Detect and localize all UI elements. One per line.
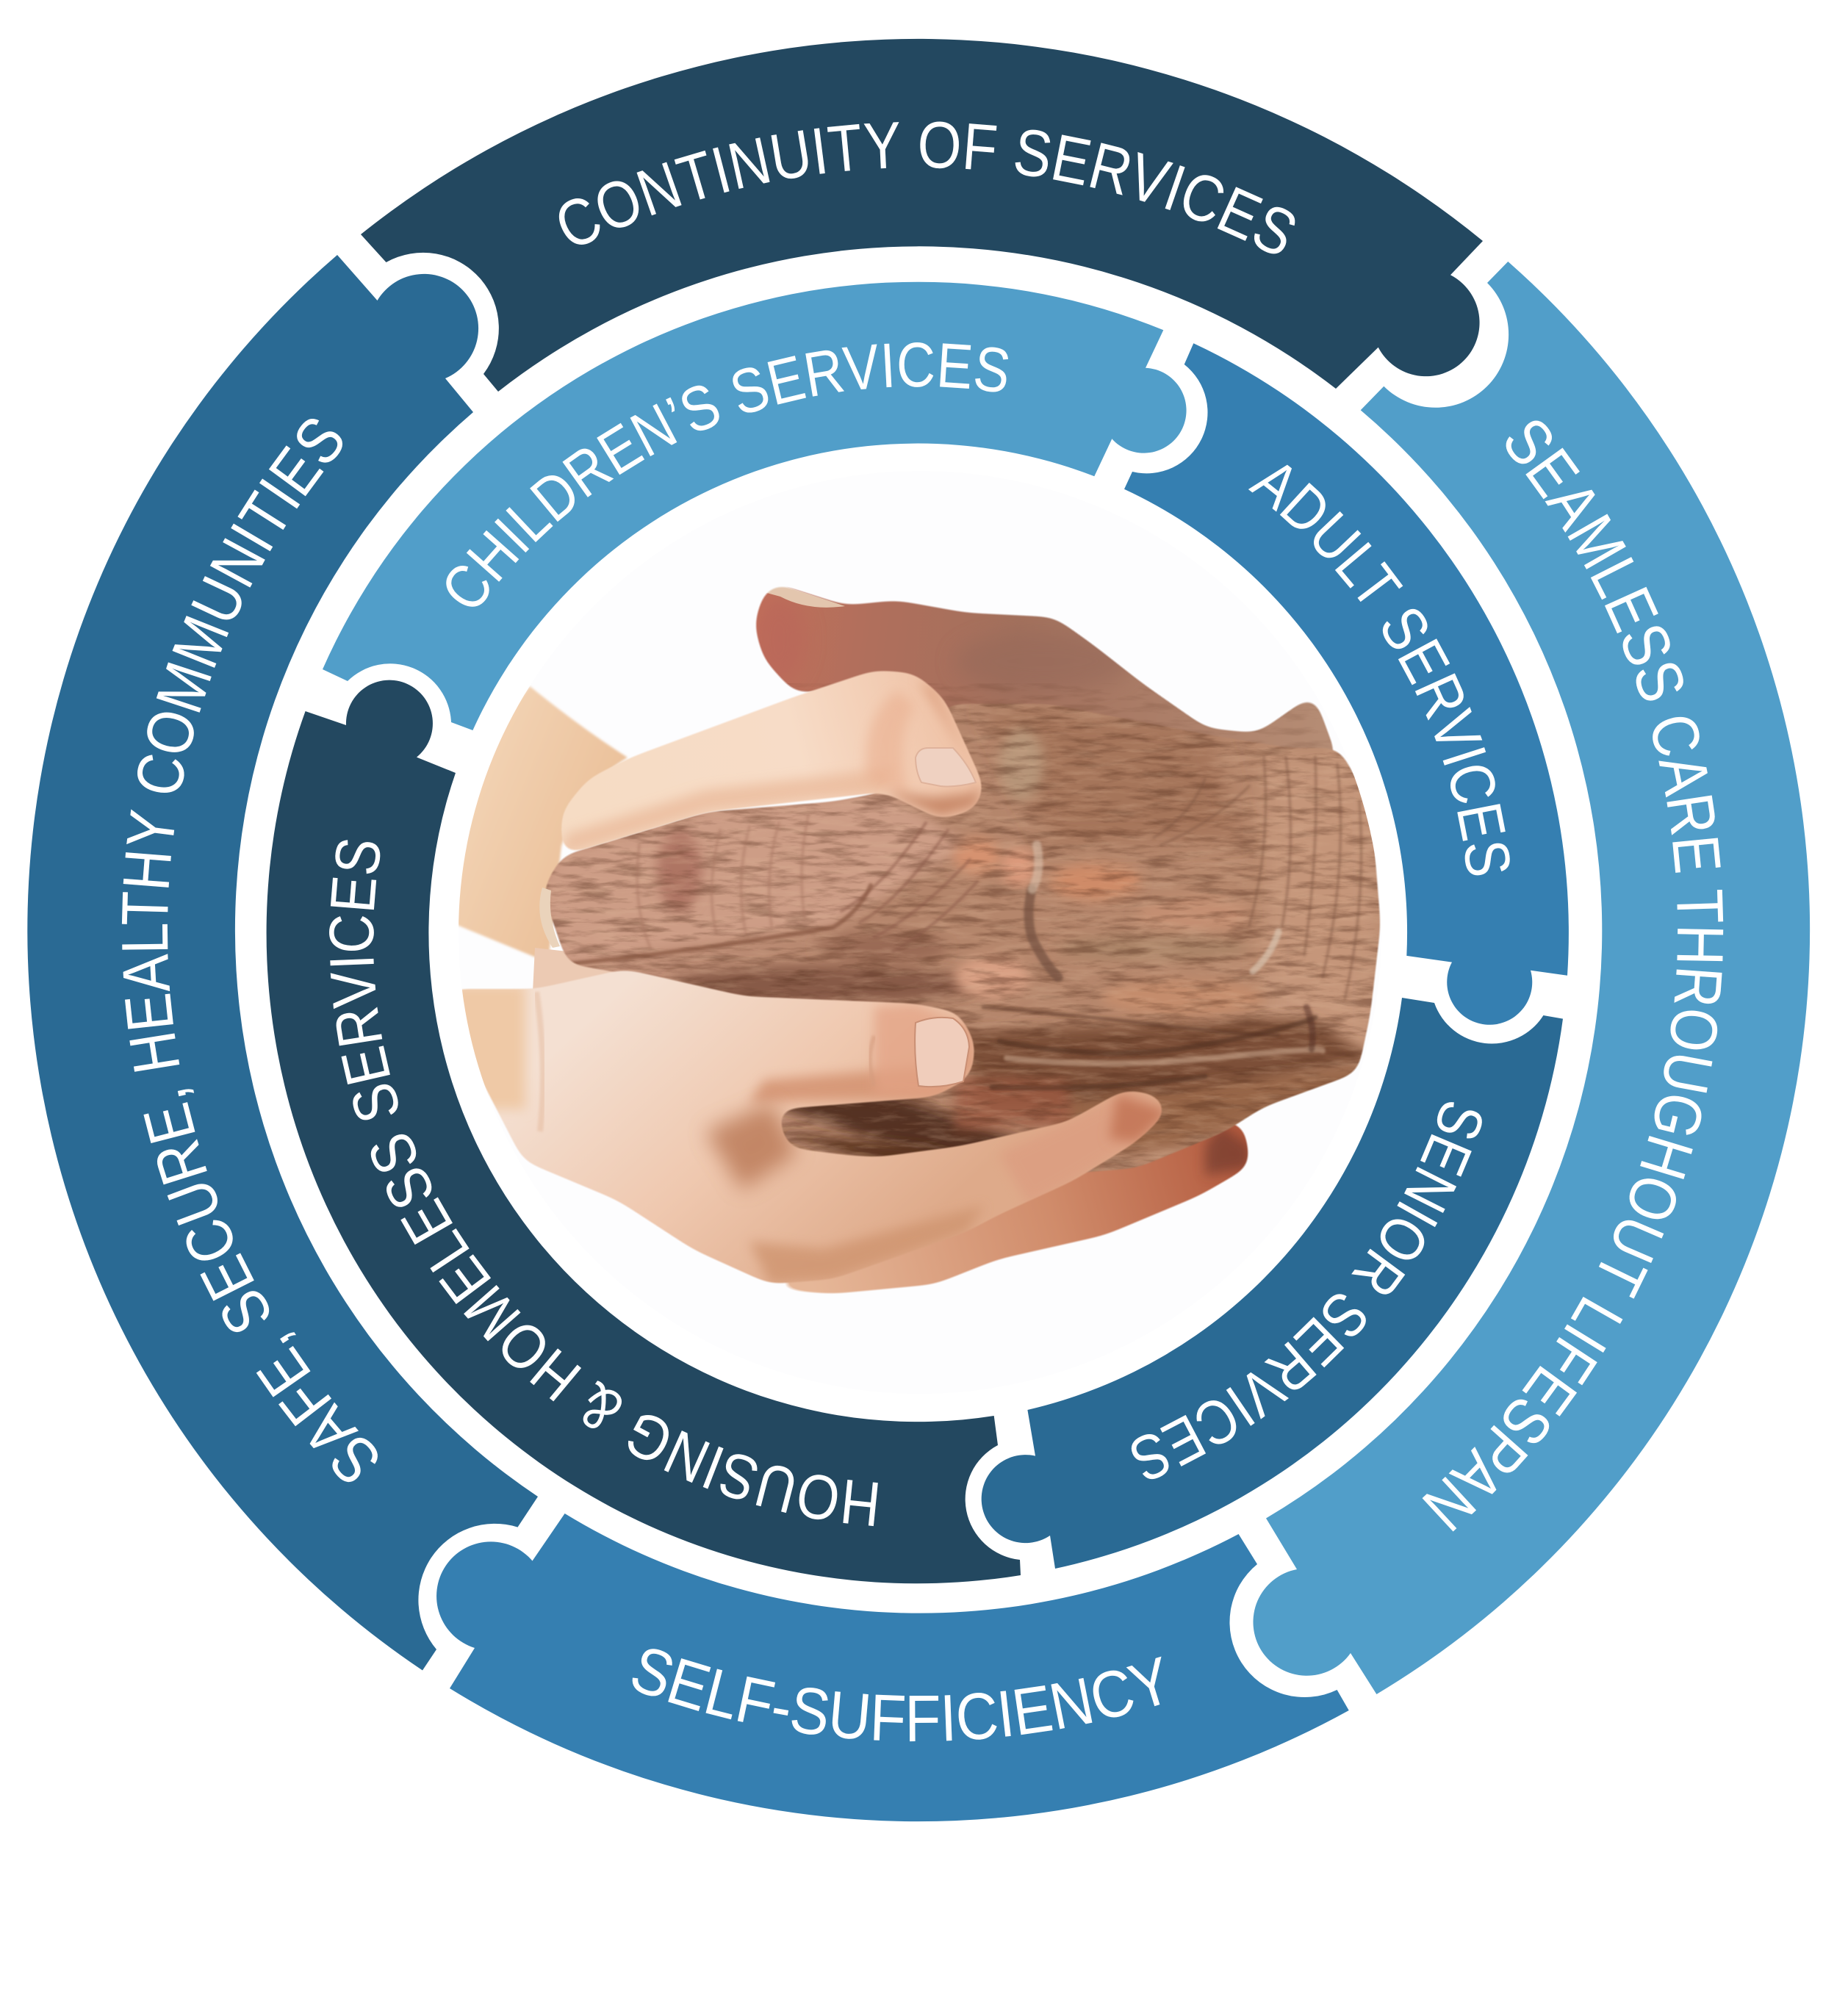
- panel: inner ring – senior services: [982, 998, 1563, 1569]
- photo: child forearm: [459, 685, 628, 958]
- panel: outer ring – continuity of services: [361, 38, 1483, 392]
- label: safe, secure, healthy communities: SAFE, SECURE, HEALTHY COMMUNITIES: [122, 419, 378, 1483]
- photo: old hand upper thumb: [755, 586, 1334, 751]
- label: adult services: ADULT SERVICES: [1248, 464, 1510, 876]
- photo: child upper hand: [561, 670, 982, 851]
- panel: outer ring – self-sufficiency: [436, 1514, 1349, 1821]
- photo: old hand fingernail: [539, 888, 560, 948]
- photo: wrinkle and vein strokes: [567, 757, 1361, 1088]
- photo: old hand back with wrinkles: [545, 704, 1381, 1173]
- photo: child lower thumbnail: [915, 1018, 969, 1087]
- panel: inner ring – children's services: [323, 254, 1187, 730]
- panel: outer ring – seamless care throughout lifespan: [1253, 262, 1810, 1694]
- panel: inner ring – adult services: [1124, 343, 1569, 1025]
- photo: old hand lower fingers: [785, 1124, 1249, 1295]
- panel: outer ring – safe, secure, healthy communities: [27, 255, 538, 1671]
- label: senior services: SENIOR SERVICES: [1132, 1102, 1482, 1480]
- photo: hidden child finger: [533, 948, 614, 989]
- label: self-sufficiency: SELF-SUFFICIENCY: [632, 1649, 1161, 1741]
- label: children's services: CHILDREN’S SERVICES: [446, 342, 1008, 607]
- label: continuity of services: CONTINUITY OF SERVICES: [558, 122, 1295, 254]
- label: housing and homeless services: HOUSING & HOMELESS SERVICES: [329, 779, 914, 1584]
- panel: photo of holding hands: [459, 586, 1381, 1295]
- photo: child lower hand: [461, 970, 1162, 1284]
- panel: inner ring – housing and homeless services: [168, 680, 1021, 1663]
- label: seamless care throughout lifespan: SEAMLESS CARE THROUGHOUT LIFESPAN: [1423, 420, 1724, 1531]
- photo: child upper thumbnail: [916, 748, 976, 786]
